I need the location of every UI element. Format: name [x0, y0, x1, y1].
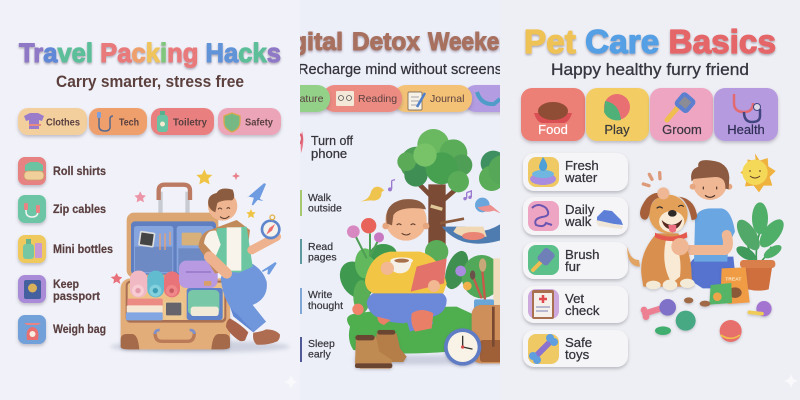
title: digital detox weekend: Detox	[352, 28, 420, 56]
tip: turn off phone: Turn off	[311, 133, 353, 148]
tip: roll shirts	[18, 157, 106, 185]
tips list	[523, 153, 628, 367]
pill: reading: Reading	[358, 93, 397, 105]
pill: journal	[393, 85, 472, 112]
tip: read pages: pages	[308, 252, 337, 264]
suitcase lid	[127, 213, 218, 278]
title: digital detox weekend	[300, 32, 500, 58]
pill: clothes: Clothes	[46, 116, 80, 128]
tips list	[18, 157, 113, 344]
dog	[627, 187, 697, 290]
suitcase base	[121, 278, 230, 349]
tree with hammock	[397, 129, 500, 244]
tip: sleep early: Sleep	[308, 338, 335, 350]
pet marks	[643, 173, 660, 186]
tips list	[300, 131, 353, 362]
pill: reading	[322, 85, 402, 112]
packed clothes	[126, 288, 223, 320]
tile: groom	[650, 88, 713, 141]
tip: zip cables	[18, 195, 106, 223]
tip: walk outside: Walk	[308, 192, 332, 204]
tip: turn off phone: phone	[311, 146, 347, 161]
tip: zip cables: Zip cables	[53, 202, 106, 216]
tip: turn off phone	[300, 131, 353, 161]
subtitle: happy healthy furry friend: Happy healthy furry friend	[551, 61, 749, 79]
pill: toiletry: Toiletry	[173, 116, 207, 128]
tip: keep passport	[18, 275, 100, 303]
treat bags: TREAT	[725, 277, 741, 283]
tip: read pages: Read	[308, 241, 333, 253]
title: digital detox weekend: Weekend	[428, 28, 527, 56]
owner	[687, 160, 736, 288]
tile: groom: Groom	[662, 122, 702, 137]
pill: tech	[89, 108, 147, 135]
subtitle: carry smarter: Carry smarter, stress free	[56, 73, 244, 91]
title: digital detox weekend: Digital	[267, 28, 343, 56]
potted plant	[732, 202, 788, 291]
tip: walk outside: outside	[308, 202, 342, 214]
tile: health: Health	[727, 122, 765, 137]
tile: food: Food	[538, 122, 568, 137]
tip: brush fur: Brush	[565, 247, 599, 262]
tip: mini bottles: Mini bottles	[53, 242, 113, 256]
category tiles	[521, 88, 778, 141]
suitcase handle	[158, 185, 190, 213]
pill: clothes	[18, 108, 87, 135]
packed rolls	[130, 271, 180, 297]
tile: food	[521, 88, 585, 141]
tip: weigh bag	[18, 315, 106, 344]
tip: safe toys	[523, 330, 628, 367]
category pills	[300, 85, 500, 116]
tip: walk outside	[300, 190, 342, 216]
tip: vet check: check	[565, 303, 600, 318]
category pills	[18, 108, 281, 135]
tip: keep passport: passport	[53, 289, 100, 303]
tile: health	[714, 88, 778, 141]
backpack	[472, 305, 512, 363]
title: travel packing hacks: Travel Packing Hacks	[19, 38, 281, 68]
icon: compass	[261, 215, 281, 239]
decorative stars and planes	[111, 169, 277, 284]
tip: fresh water	[523, 153, 628, 191]
tip: write thought: thought	[308, 300, 343, 312]
flowers	[347, 218, 472, 315]
subtitle: recharge mind: Recharge mind without screens	[298, 62, 502, 78]
reader	[365, 199, 447, 332]
pill: journal: Journal	[430, 93, 464, 105]
pill: purple hammock	[466, 85, 500, 116]
tip: fresh water: water	[564, 170, 598, 185]
grass and bushes	[333, 240, 502, 353]
tile: play	[586, 88, 649, 141]
traveller	[198, 189, 280, 345]
tip: keep passport: Keep	[53, 277, 79, 291]
tip: vet check	[523, 286, 628, 323]
pill: nature	[300, 85, 332, 116]
icon: sparkle watermark	[784, 374, 798, 388]
icon: clock	[444, 328, 481, 366]
icon: sparkle watermark left	[284, 375, 298, 389]
birds and notes	[359, 180, 501, 213]
tip: vet check: Vet	[565, 291, 584, 306]
treat bags	[709, 267, 750, 305]
tip: safe toys: toys	[565, 347, 590, 362]
illustration: owner with dog	[627, 153, 788, 342]
pill: tech: Tech	[119, 116, 139, 128]
illustration: suitcase and traveller	[110, 169, 290, 353]
tip: safe toys: Safe	[565, 335, 592, 350]
tip: roll shirts: Roll shirts	[53, 164, 106, 178]
tip: fresh water: Fresh	[565, 158, 599, 173]
tip: daily walk	[523, 197, 628, 235]
illustration: reader in garden	[340, 129, 500, 371]
tip: brush fur: fur	[565, 259, 581, 274]
pill: nature: Nature	[292, 93, 324, 105]
tile: play: Play	[604, 122, 630, 137]
tip: write thought: Write	[308, 289, 332, 301]
tip: mini bottles	[18, 235, 113, 263]
pill: safety: Safety	[245, 116, 273, 128]
tip: daily walk: Daily	[565, 202, 595, 217]
tip: weigh bag: Weigh bag	[53, 322, 106, 336]
icon: sun	[740, 153, 776, 192]
panel: digital detox weekend	[300, 31, 500, 372]
boots	[355, 330, 407, 369]
tip: sleep early	[300, 337, 335, 362]
tip: read pages	[300, 239, 337, 264]
pill: safety	[218, 108, 281, 135]
art supplies	[470, 258, 507, 316]
pet toys	[641, 297, 772, 342]
purple bag	[179, 261, 218, 288]
title: pet care basics: Pet Care Basics	[524, 23, 776, 60]
panel: pet care basics	[500, 0, 800, 400]
tip: sleep early: early	[308, 348, 332, 360]
tip: brush fur	[523, 242, 628, 279]
panel: travel packing hacks	[16, 42, 290, 354]
pill: toiletry	[151, 108, 214, 135]
tip: write thought	[300, 288, 343, 314]
tip: daily walk: walk	[564, 214, 592, 229]
